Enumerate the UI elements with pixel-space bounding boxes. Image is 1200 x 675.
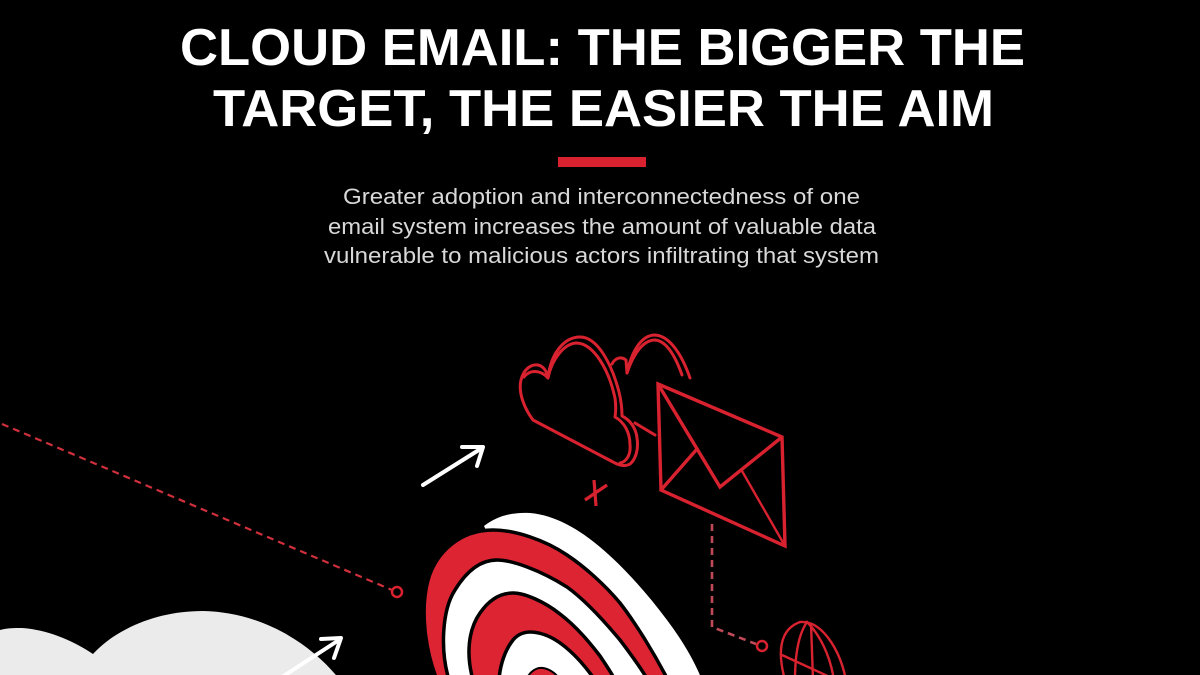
inner red ring xyxy=(469,593,615,675)
arrow: upper white xyxy=(423,447,483,485)
arrow: lower white xyxy=(282,638,341,675)
subtitle text block: email system increases the amount of valuable data xyxy=(328,214,877,239)
icon: red x mark xyxy=(585,480,607,506)
front cloud inner edge xyxy=(524,343,630,463)
outer white rim xyxy=(484,513,702,675)
subtitle text block: vulnerable to malicious actors infiltrating that system xyxy=(324,243,879,268)
dashed connector: envelope to globe xyxy=(712,524,756,644)
icon: red globe xyxy=(781,622,846,675)
front cloud outer silhouette xyxy=(520,337,638,465)
connector node: globe xyxy=(757,641,767,651)
dashed connector: left xyxy=(2,424,392,590)
red accent bar xyxy=(558,157,646,167)
large white cloud xyxy=(0,611,340,675)
icon: red envelope xyxy=(658,384,785,546)
back cloud arcs xyxy=(612,335,690,378)
center red dot xyxy=(526,668,560,675)
outer red ring xyxy=(424,530,668,675)
title xyxy=(180,19,1025,138)
white ring xyxy=(443,560,648,675)
title: TARGET, THE EASIER THE AIM xyxy=(213,80,994,138)
subtitle text block: Greater adoption and interconnectedness of one xyxy=(343,184,860,209)
title: CLOUD EMAIL: THE BIGGER THE xyxy=(180,19,1025,77)
icon: red clouds xyxy=(520,335,690,465)
target bullseye xyxy=(424,513,702,675)
subtitle text block xyxy=(324,184,879,268)
inner white ring xyxy=(499,632,595,675)
connector node: left xyxy=(392,587,402,597)
